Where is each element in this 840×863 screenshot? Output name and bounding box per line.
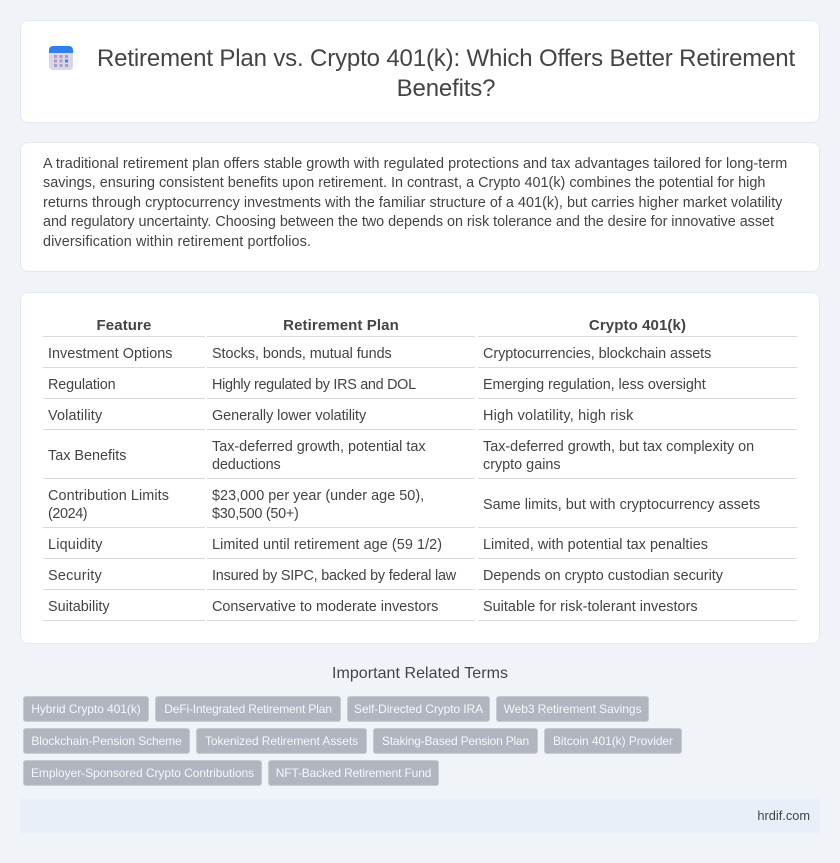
footer source text: hrdif.com	[757, 808, 810, 823]
comparison table panel	[20, 292, 820, 644]
intro paragraph: returns through cryptocurrency investments with the familiar structure of a 401(k), but carries higher market volatility	[43, 195, 782, 211]
comparison table: Suitable for risk-tolerant investors	[483, 599, 698, 615]
comparison table: Stocks, bonds, mutual funds	[212, 346, 392, 362]
title: Retirement Plan vs. Crypto 401(k): Which Offers Better Retirement	[97, 45, 795, 72]
comparison table: Highly regulated by IRS and DOL	[212, 377, 416, 393]
comparison table: Emerging regulation, less oversight	[483, 377, 706, 393]
comparison table: Security	[48, 568, 102, 584]
related terms tags: Self-Directed Crypto IRA	[354, 702, 483, 716]
icon: calendar	[49, 46, 73, 70]
related terms tags: Bitcoin 401(k) Provider	[553, 734, 673, 748]
footer bar	[20, 799, 820, 833]
related terms tags: NFT-Backed Retirement Fund	[276, 766, 431, 780]
comparison table: $23,000 per year (under age 50),	[212, 488, 424, 504]
intro paragraph: and regulatory uncertainty. Choosing between the two depends on risk tolerance and the desire for innovative asset	[43, 214, 774, 230]
comparison table: Insured by SIPC, backed by federal law	[212, 568, 456, 584]
comparison table: High volatility, high risk	[483, 408, 634, 424]
comparison table: Suitability	[48, 599, 110, 615]
comparison table: Contribution Limits	[48, 488, 169, 504]
comparison table: Tax-deferred growth, potential tax	[212, 439, 426, 455]
comparison table: deductions	[212, 457, 281, 473]
header card	[20, 20, 820, 123]
comparison table: Regulation	[48, 377, 116, 393]
comparison table: Investment Options	[48, 346, 173, 362]
intro text panel	[20, 142, 820, 272]
comparison table: (2024)	[48, 506, 87, 522]
comparison table	[43, 317, 797, 621]
comparison table: Feature	[97, 317, 151, 334]
comparison table: Retirement Plan	[283, 317, 399, 334]
related terms tags: DeFi-Integrated Retirement Plan	[164, 702, 332, 716]
comparison table: Depends on crypto custodian security	[483, 568, 723, 584]
comparison table: Generally lower volatility	[212, 408, 366, 424]
comparison table: $30,500 (50+)	[212, 506, 299, 522]
related terms tags: Tokenized Retirement Assets	[205, 734, 358, 748]
intro paragraph: A traditional retirement plan offers stable growth with regulated protections and tax advantages tailored for long-term	[43, 156, 787, 172]
intro paragraph	[43, 156, 787, 250]
title	[97, 45, 795, 102]
comparison table: Same limits, but with cryptocurrency assets	[483, 497, 760, 513]
intro paragraph: savings, ensuring consistent benefits upon retirement. In contrast, a Crypto 401(k) combines the potential for high	[43, 175, 765, 191]
title: Benefits?	[397, 75, 495, 102]
comparison table: Volatility	[48, 408, 102, 424]
comparison table: Liquidity	[48, 537, 103, 553]
intro paragraph: diversification within retirement portfolios.	[43, 234, 311, 250]
comparison table: Crypto 401(k)	[589, 317, 686, 334]
comparison table: crypto gains	[483, 457, 561, 473]
comparison table: Limited until retirement age (59 1/2)	[212, 537, 442, 553]
comparison table: Conservative to moderate investors	[212, 599, 438, 615]
related terms tags: Web3 Retirement Savings	[504, 702, 641, 716]
related terms tags: Hybrid Crypto 401(k)	[31, 702, 141, 716]
related terms tags: Staking-Based Pension Plan	[382, 734, 529, 748]
comparison table: Tax-deferred growth, but tax complexity on	[483, 439, 754, 455]
related terms tags: Blockchain-Pension Scheme	[31, 734, 182, 748]
related terms heading: Important Related Terms	[332, 665, 508, 682]
comparison table: Tax Benefits	[48, 448, 126, 464]
related terms tags: Employer-Sponsored Crypto Contributions	[31, 766, 254, 780]
comparison table: Cryptocurrencies, blockchain assets	[483, 346, 711, 362]
comparison table: Limited, with potential tax penalties	[483, 537, 708, 553]
related terms tags	[23, 696, 682, 786]
